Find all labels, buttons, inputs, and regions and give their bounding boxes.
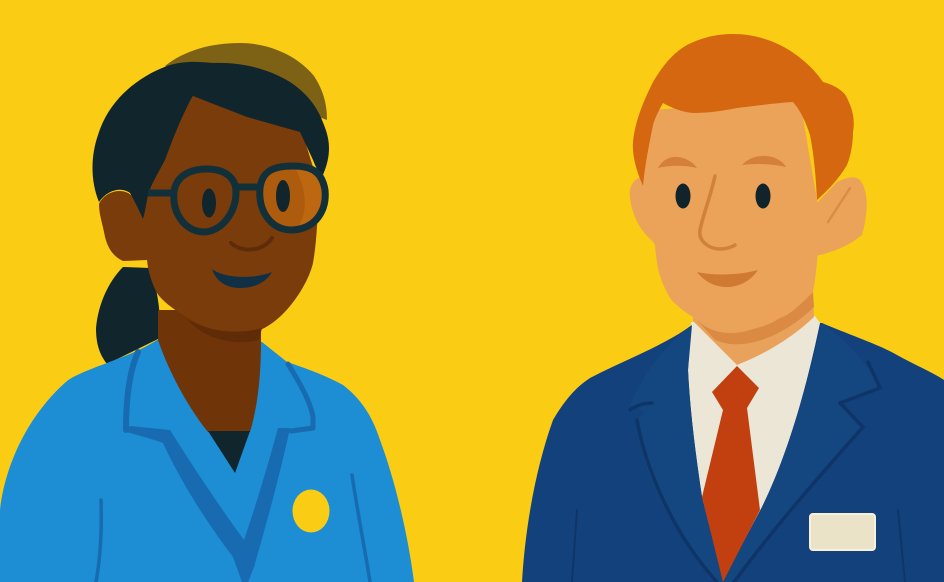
nose xyxy=(700,176,735,249)
hair: ponytail xyxy=(96,267,160,364)
hair: olive highlight xyxy=(165,43,327,120)
face xyxy=(140,96,318,333)
hair: dark cap xyxy=(92,62,329,219)
mouth xyxy=(212,269,272,288)
nose xyxy=(231,238,272,250)
figure: man in navy suit xyxy=(522,34,944,582)
ear xyxy=(99,191,147,261)
blue coat xyxy=(0,340,414,582)
neck shadow xyxy=(695,292,814,344)
lapel left xyxy=(630,325,724,582)
chin shadow xyxy=(187,319,262,342)
white shirt xyxy=(688,316,820,582)
neck xyxy=(158,310,261,432)
hair xyxy=(633,34,854,200)
figure: woman in blue coat xyxy=(0,43,414,582)
lapel seams xyxy=(572,362,905,582)
glasses: frame xyxy=(148,166,325,232)
collar outlines xyxy=(96,352,370,582)
mouth xyxy=(697,270,758,287)
ear left xyxy=(630,175,655,243)
eyes xyxy=(676,184,770,208)
eyebrows xyxy=(658,156,786,168)
lapel right xyxy=(723,323,880,582)
neck xyxy=(693,280,814,365)
face xyxy=(643,100,818,330)
eyes xyxy=(202,180,290,218)
name badge xyxy=(810,514,875,550)
yellow badge xyxy=(292,490,330,532)
undershirt xyxy=(208,431,250,473)
ear right xyxy=(815,177,867,256)
tie xyxy=(702,366,760,582)
collar band xyxy=(124,426,290,582)
navy jacket xyxy=(522,323,944,582)
glasses: right lens tint xyxy=(260,166,325,230)
